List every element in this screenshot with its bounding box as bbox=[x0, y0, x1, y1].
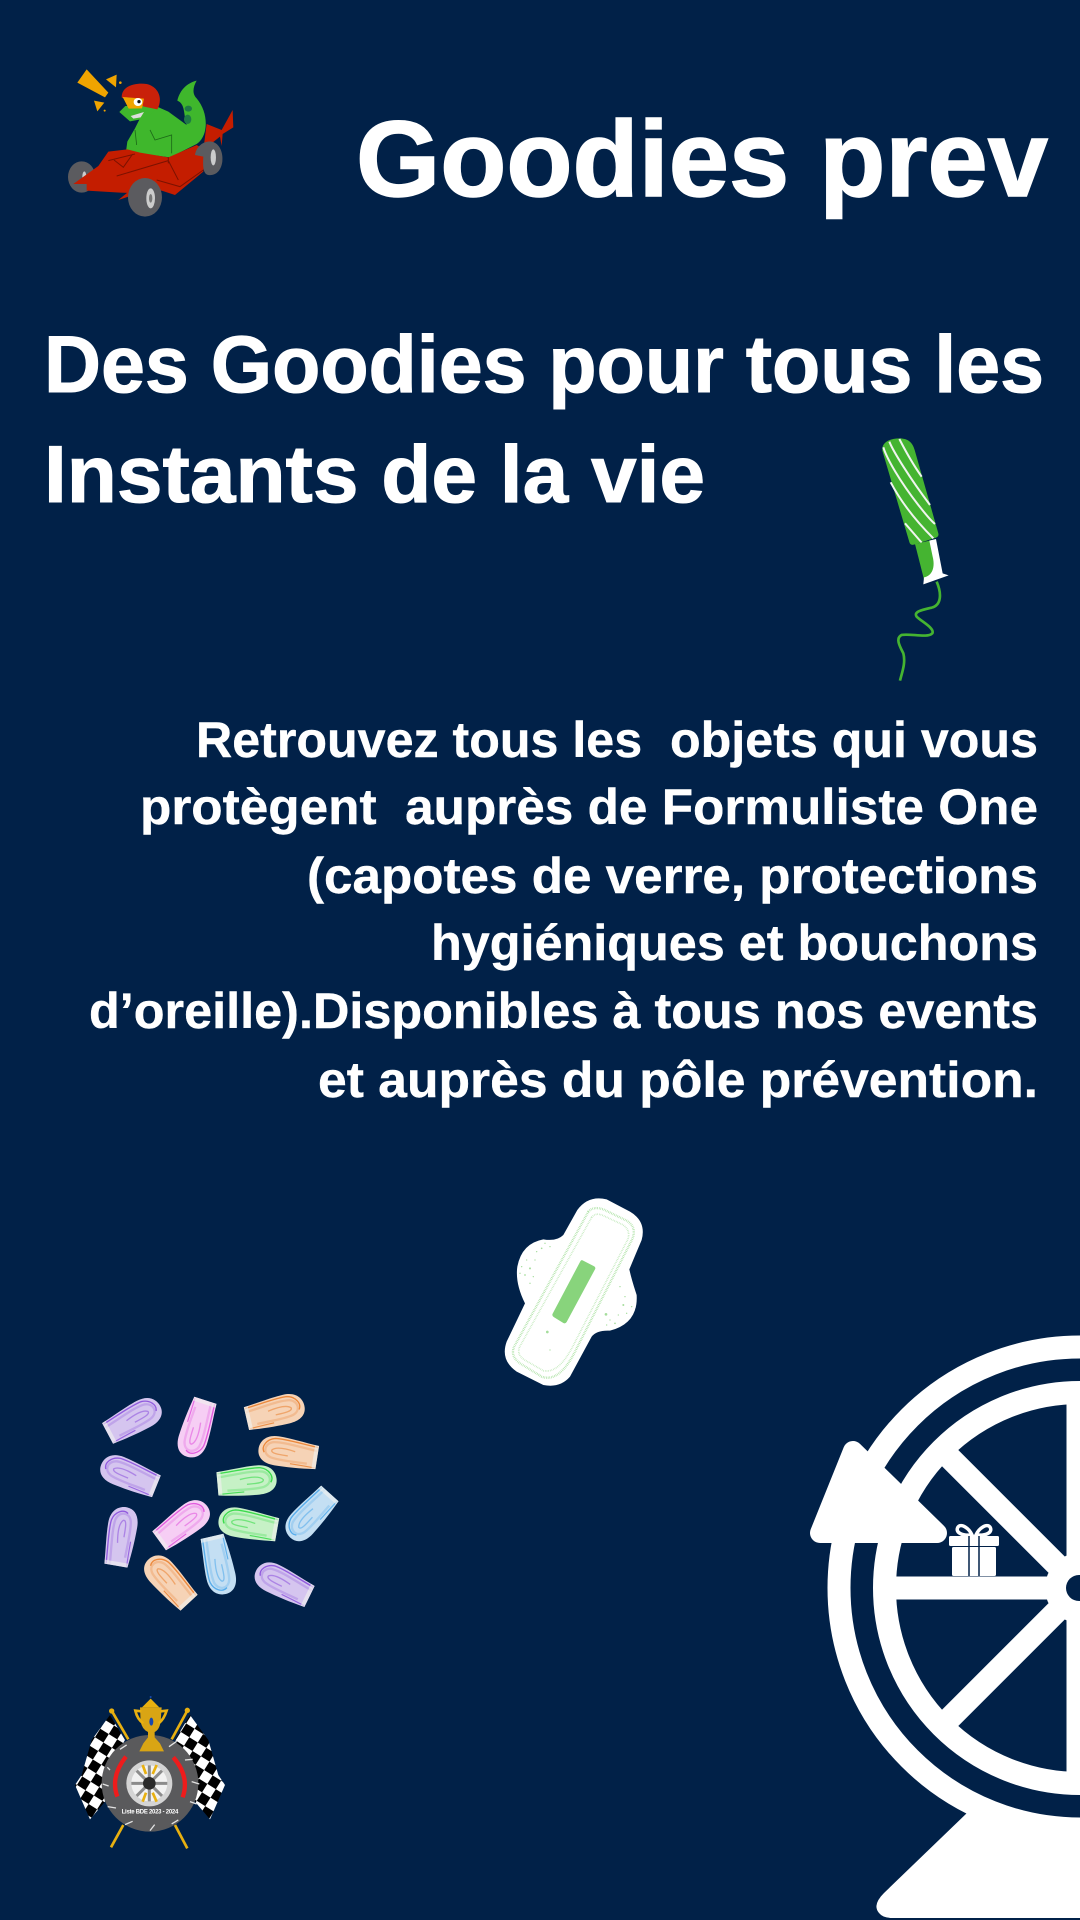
body text: (capotes de verre, protections bbox=[307, 848, 1038, 904]
body text: d’oreille).Disponibles à tous nos events bbox=[89, 983, 1038, 1039]
body text bbox=[89, 712, 1038, 1108]
icon: tampon bbox=[882, 438, 949, 681]
icon: dinosaur driving a racing car bbox=[68, 69, 233, 217]
icon: prize wheel bbox=[820, 1347, 1080, 1918]
arrow pointer bbox=[820, 1451, 937, 1533]
icon: earplugs bbox=[96, 1391, 341, 1612]
body text: protègent auprès de Formuliste One bbox=[140, 779, 1038, 835]
logo caption: Liste BDE 2023 - 2024 bbox=[122, 1809, 179, 1815]
body text: hygiéniques et bouchons bbox=[431, 915, 1038, 971]
wheel base bbox=[876, 1790, 1080, 1918]
wheel outer ring bbox=[839, 1347, 1080, 1829]
wheel hub bbox=[1045, 1553, 1080, 1623]
wheel hub hole bbox=[1066, 1575, 1080, 1601]
heading bbox=[44, 320, 1044, 520]
wheel inner ring bbox=[884, 1392, 1080, 1784]
icon: sanitary pad bbox=[505, 1198, 643, 1386]
heading: Instants de la vie bbox=[44, 430, 705, 520]
body text: Retrouvez tous les objets qui vous bbox=[196, 712, 1038, 768]
heading: Des Goodies pour tous les bbox=[44, 320, 1044, 410]
icon: gift bbox=[949, 1526, 999, 1576]
icon: BDE list logo with tyre, trophy and flags bbox=[75, 1696, 225, 1848]
title: Goodies prev bbox=[356, 98, 1048, 219]
wheel spokes bbox=[895, 1395, 1080, 1781]
body text: et auprès du pôle prévention. bbox=[318, 1052, 1038, 1108]
